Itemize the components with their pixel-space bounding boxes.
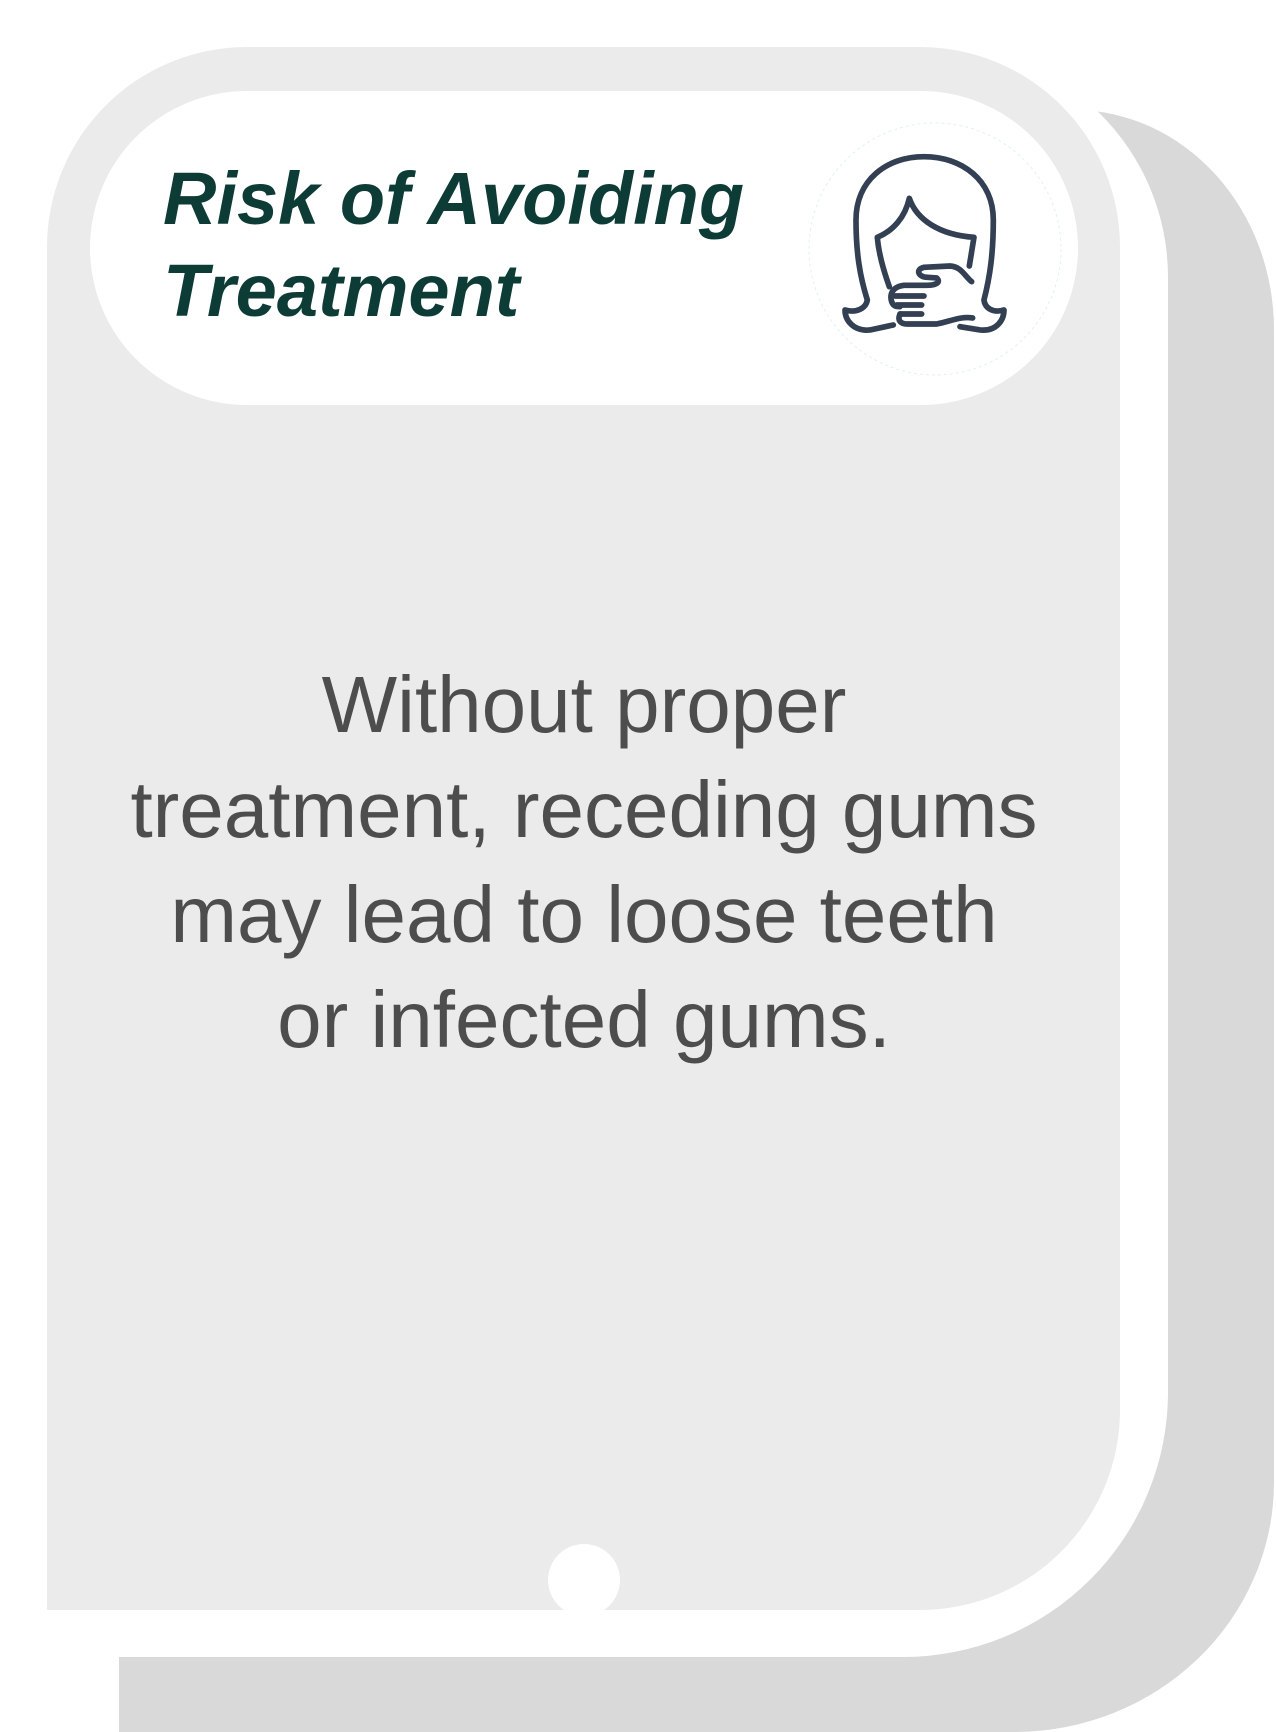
header pill xyxy=(90,91,1078,405)
body text: Without proper xyxy=(322,660,846,749)
title: Treatment xyxy=(163,249,519,332)
title xyxy=(163,157,744,332)
panel: card xyxy=(47,47,1120,1610)
body text xyxy=(130,660,1038,1064)
body text: may lead to loose teeth xyxy=(170,870,998,959)
icon: person covering mouth xyxy=(808,122,1062,376)
home button circle xyxy=(548,1544,620,1616)
title: Risk of Avoiding xyxy=(163,157,744,240)
body text: or infected gums. xyxy=(277,975,891,1064)
body text: treatment, receding gums xyxy=(130,765,1038,854)
